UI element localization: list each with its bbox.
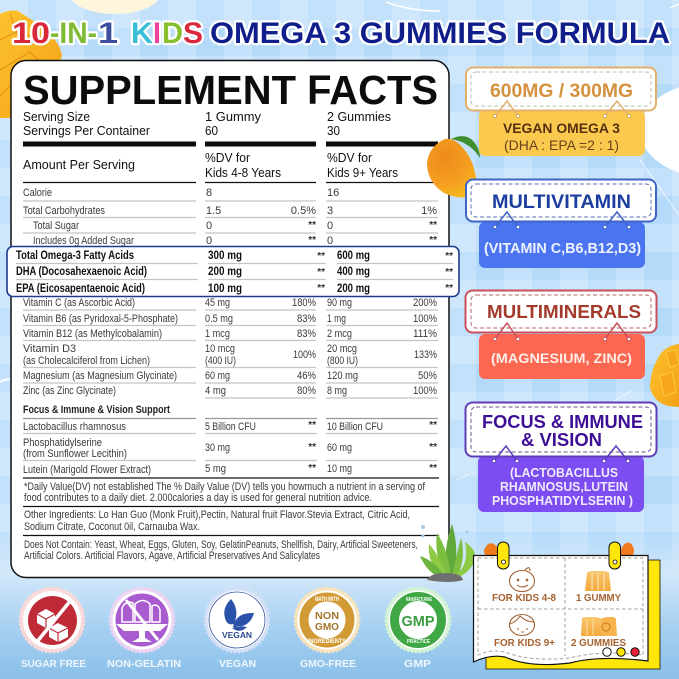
nutrition rows: calories, carbs, sugar: 8 <box>206 187 212 199</box>
panel: focus immune vision: (LACTOBACILLUS <box>510 466 618 480</box>
nutrition rows: calories, carbs, sugar: 1% <box>421 205 437 217</box>
badge: sugar free <box>20 588 86 670</box>
vitamins and minerals rows: 100% <box>413 313 437 325</box>
nutrition rows: calories, carbs, sugar: ** <box>429 220 437 231</box>
vitamins and minerals rows: 200% <box>413 297 437 309</box>
icon: seaweed and rock <box>420 524 475 582</box>
nutrition rows: calories, carbs, sugar: 3 <box>327 205 333 217</box>
title: K <box>131 17 153 50</box>
callout: omega-3 highlight box: ** <box>317 283 325 294</box>
title: -IN- <box>50 17 97 50</box>
callout: omega-3 highlight box: DHA (Docosahexaenoic Acid) <box>16 266 147 278</box>
nutrition rows: calories, carbs, sugar: Includes 0g Added Sugar <box>33 235 134 247</box>
title: I <box>153 17 161 50</box>
nutrition rows: calories, carbs, sugar: 0 <box>206 220 212 232</box>
badge: vegan <box>204 588 270 670</box>
vitamins and minerals rows: 20 mcg <box>327 343 357 355</box>
badge: gmo-free: GMO-FREE <box>300 658 356 670</box>
focus, immune and vision rows: ** <box>429 442 437 453</box>
nutrition rows: calories, carbs, sugar: ** <box>429 235 437 246</box>
vitamins and minerals rows: Vitamin C (as Ascorbic Acid) <box>23 297 135 309</box>
serving info: Servings Per Container <box>23 124 150 138</box>
nutrition rows: calories, carbs, sugar: Total Sugar <box>33 220 79 232</box>
other ingredients: Sodium Citrate, Coconut 0il, Carnauba Wax. <box>24 521 200 533</box>
serving info <box>23 110 438 146</box>
does not contain: Artificial Colors. Artificial Flavors, Agave, Artificial Preservatives And Salicylates <box>24 550 320 562</box>
serving info: 1 Gummy <box>205 110 262 124</box>
focus, immune and vision rows: Lactobacillus rhamnosus <box>23 421 126 433</box>
nutrition rows: calories, carbs, sugar: 0.5% <box>291 205 316 217</box>
panel: focus immune vision <box>466 402 656 512</box>
focus, immune and vision rows: ** <box>308 420 316 431</box>
panel: dosage note: 2 GUMMIES <box>571 638 626 649</box>
serving info: Serving Size <box>23 110 90 124</box>
vitamins and minerals rows: 133% <box>414 349 437 361</box>
does not contain: Does Not Contain: Yeast, Wheat, Eggs, Gluten, Soy, GelatinPeanuts, Shellfish, Dairy, Artificial Sweeteners, <box>24 539 418 551</box>
serving info: 60 <box>205 124 218 138</box>
icon: child face 9+ <box>510 614 534 636</box>
focus, immune and vision rows: ** <box>429 463 437 474</box>
panel: focus immune vision: RHAMNOSUS,LUTEIN <box>500 480 628 494</box>
vitamins and minerals rows: Magnesium (as Magnesium Glycinate) <box>23 370 177 382</box>
callout: omega-3 highlight box: 400 mg <box>337 266 370 278</box>
callout: omega-3 highlight box: 600 mg <box>337 250 370 262</box>
badge: vegan: VEGAN <box>222 631 252 640</box>
vitamins and minerals rows: 8 mg <box>327 385 347 397</box>
badge: gmp: GMP <box>404 658 431 670</box>
panel: focus immune vision: PHOSPHATIDYLSERIN ) <box>492 494 633 508</box>
panel: multiminerals: (MAGNESIUM, ZINC) <box>491 350 632 366</box>
badge: gmo-free: GMO <box>315 622 339 633</box>
footnote: daily value: food contributes to a daily diet. 2.000calories a day is used for general nutrition advice. <box>24 492 372 504</box>
title: S <box>183 17 203 50</box>
focus, immune and vision rows <box>23 404 438 476</box>
icon: child face 4-8 <box>510 568 534 592</box>
other ingredients <box>24 509 410 533</box>
panel: dosage note <box>474 542 660 669</box>
title: D <box>162 17 183 50</box>
focus, immune and vision rows: ** <box>429 420 437 431</box>
panel: multiminerals: MULTIMINERALS <box>487 301 641 322</box>
column headers: %DV for <box>327 151 372 165</box>
vitamins and minerals rows <box>23 297 438 398</box>
vitamins and minerals rows: 1 mcg <box>205 328 230 340</box>
nutrition rows: calories, carbs, sugar: ** <box>308 220 316 231</box>
vitamins and minerals rows: 120 mg <box>327 370 358 382</box>
heading: supplement facts: SUPPLEMENT FACTS <box>23 67 438 113</box>
column headers: Kids 9+ Years <box>327 166 398 180</box>
icon: cut mango right <box>650 344 679 407</box>
focus, immune and vision rows: 30 mg <box>205 442 230 454</box>
callout: omega-3 highlight box: ** <box>445 283 453 294</box>
focus, immune and vision rows: ** <box>308 442 316 453</box>
column headers: %DV for <box>205 151 250 165</box>
nutrition rows: calories, carbs, sugar: 0 <box>327 235 333 247</box>
focus, immune and vision rows: Phosphatidylserine <box>23 437 102 449</box>
panel: vegan omega 3: (DHA : EPA =2 : 1) <box>504 138 619 153</box>
nutrition rows: calories, carbs, sugar: 0 <box>327 220 333 232</box>
callout: omega-3 highlight box: EPA (Eicosapentaenoic Acid) <box>16 283 145 295</box>
column headers: Kids 4-8 Years <box>205 166 281 180</box>
badge: non-gelatin <box>107 588 181 670</box>
panel: multivitamin: MULTIVITAMIN <box>492 191 631 213</box>
callout: omega-3 highlight box: ** <box>317 251 325 262</box>
vitamins and minerals rows: 10 mcg <box>205 343 235 355</box>
badge: sugar free: SUGAR FREE <box>21 658 86 670</box>
nutrition rows: calories, carbs, sugar: Calorie <box>23 187 52 199</box>
does not contain <box>24 539 418 562</box>
vitamins and minerals rows: Vitamin D3 <box>23 343 76 355</box>
badge: gmp <box>386 588 450 670</box>
serving info: 2 Gummies <box>327 110 391 124</box>
vitamins and minerals rows: 80% <box>297 385 316 397</box>
vitamins and minerals rows: (as Cholecalciferol from Lichen) <box>23 355 150 367</box>
vitamins and minerals rows: 100% <box>293 349 316 361</box>
nutrition rows: calories, carbs, sugar <box>23 187 438 247</box>
nutrition rows: calories, carbs, sugar: 0 <box>206 235 212 247</box>
icon: two gummies <box>581 617 617 636</box>
callout: omega-3 highlight box <box>7 246 459 296</box>
focus, immune and vision rows: 5 mg <box>205 463 226 475</box>
vitamins and minerals rows: 83% <box>297 313 316 325</box>
panel: multivitamin <box>466 180 656 268</box>
focus, immune and vision rows: Lutein (Marigold Flower Extract) <box>23 464 151 476</box>
callout: omega-3 highlight box: 200 mg <box>208 266 242 278</box>
callout: omega-3 highlight box: Total Omega-3 Fatty Acids <box>16 250 134 262</box>
callout: omega-3 highlight box: ** <box>445 251 453 262</box>
badge: gmo-free <box>294 588 360 670</box>
nutrition rows: calories, carbs, sugar: 16 <box>327 187 339 199</box>
callout: omega-3 highlight box: ** <box>445 267 453 278</box>
title: OMEGA 3 GUMMIES FORMULA <box>210 17 670 50</box>
callout: omega-3 highlight box: ** <box>317 267 325 278</box>
column headers: Amount Per Serving <box>23 158 135 172</box>
panel: dosage note: 1 GUMMY <box>576 593 621 604</box>
vitamins and minerals rows: Vitamin B6 (as Pyridoxal-5-Phosphate) <box>23 313 178 325</box>
icon: one gummy <box>585 571 611 591</box>
vitamins and minerals rows: (800 IU) <box>327 355 358 367</box>
callout: omega-3 highlight box: 200 mg <box>337 283 370 295</box>
footnote: daily value: *Daily Value(DV) not established The % Daily Value (DV) tells you howmuch a nutrient in a serving of <box>24 481 426 493</box>
panel: vegan omega 3 <box>466 68 656 156</box>
title <box>12 17 670 50</box>
badge: gmo-free: MATH WITH <box>315 597 339 603</box>
panel: focus immune vision: FOCUS & IMMUNE <box>482 412 643 432</box>
badge: vegan: VEGAN <box>219 658 256 670</box>
vitamins and minerals rows: 50% <box>418 370 437 382</box>
vitamins and minerals rows: 45 mg <box>205 297 230 309</box>
vitamins and minerals rows: 4 mg <box>205 385 226 397</box>
panel: dosage note: FOR KIDS 4-8 <box>492 593 556 604</box>
badge: gmo-free: INGREDIENTS <box>308 639 346 645</box>
vitamins and minerals rows: 46% <box>297 370 316 382</box>
vitamins and minerals rows: 2 mcg <box>327 328 352 340</box>
focus, immune and vision rows: 10 mg <box>327 463 352 475</box>
clips <box>498 542 620 569</box>
nutrition rows: calories, carbs, sugar: 1.5 <box>206 205 221 217</box>
vitamins and minerals rows: (400 IU) <box>205 355 236 367</box>
badge: gmp: GMP <box>402 613 434 630</box>
panel: dosage note: FOR KIDS 9+ <box>494 638 555 649</box>
badge: gmp: PRACTICE <box>407 639 431 645</box>
other ingredients: Other Ingredients: Lo Han Guo (Monk Fruit),Pectin, Natural fruit Flavor.Stevia Extract, Citric Acid, <box>24 509 410 521</box>
nutrition rows: calories, carbs, sugar: Total Carbohydrates <box>23 205 105 217</box>
icon: whole mango <box>427 136 482 198</box>
vitamins and minerals rows: 100% <box>413 385 437 397</box>
nutrition rows: calories, carbs, sugar: ** <box>308 235 316 246</box>
panel: multivitamin: (VITAMIN C,B6,B12,D3) <box>484 241 641 257</box>
panel: vegan omega 3: 600MG / 300MG <box>490 81 633 102</box>
panel: focus immune vision: & VISION <box>521 430 602 450</box>
footnote: daily value <box>24 481 426 504</box>
vitamins and minerals rows: Zinc (as Zinc Glycinate) <box>23 385 116 397</box>
serving info: 30 <box>327 124 340 138</box>
vitamins and minerals rows: 180% <box>292 297 316 309</box>
callout: omega-3 highlight box: 100 mg <box>208 283 242 295</box>
title: 1 <box>98 17 118 50</box>
vitamins and minerals rows: 0.5 mg <box>205 313 233 325</box>
panel: supplement facts <box>11 60 449 578</box>
callout: omega-3 highlight box: 300 mg <box>208 250 242 262</box>
badge: gmo-free: NON <box>315 611 339 622</box>
vitamins and minerals rows: 90 mg <box>327 297 352 309</box>
vitamins and minerals rows: 60 mg <box>205 370 230 382</box>
icon: cut mango top left <box>0 10 62 118</box>
focus, immune and vision rows: 5 Billion CFU <box>205 421 256 433</box>
focus, immune and vision rows: Focus & Immune & Vision Support <box>23 404 170 416</box>
decorative dots <box>603 648 639 656</box>
badge: non-gelatin: NON-GELATIN <box>107 658 181 670</box>
focus, immune and vision rows: (from Sunflower Lecithin) <box>23 448 127 460</box>
badge: gmp: MANUFACTURING <box>406 597 432 603</box>
column headers <box>23 151 438 182</box>
title: 10 <box>12 17 50 50</box>
vitamins and minerals rows: 1 mg <box>327 313 346 325</box>
panel: multiminerals <box>466 290 656 379</box>
focus, immune and vision rows: ** <box>308 463 316 474</box>
focus, immune and vision rows: 10 Billion CFU <box>327 421 383 433</box>
vitamins and minerals rows: 111% <box>413 328 437 340</box>
panel: vegan omega 3: VEGAN OMEGA 3 <box>503 120 620 136</box>
focus, immune and vision rows: 60 mg <box>327 442 352 454</box>
vitamins and minerals rows: 83% <box>297 328 316 340</box>
vitamins and minerals rows: Vitamin B12 (as Methylcobalamin) <box>23 328 162 340</box>
